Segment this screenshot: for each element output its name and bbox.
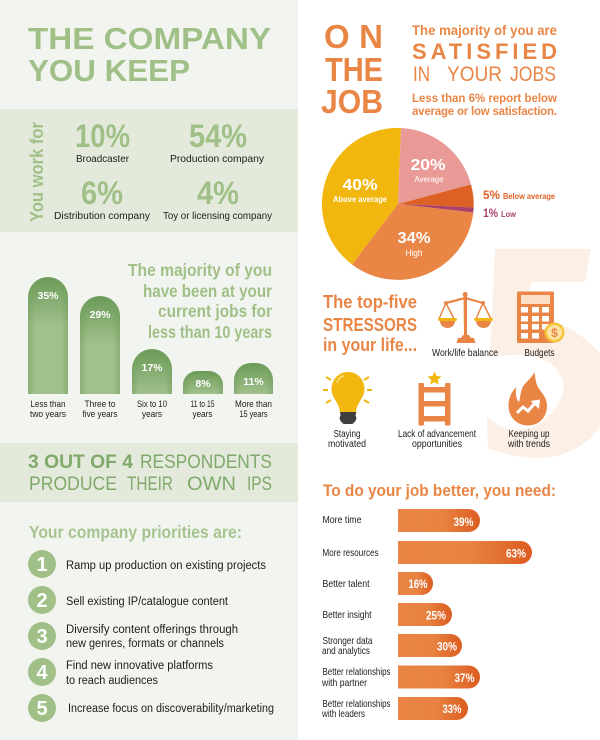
bar: less than two years: 35% xyxy=(37,290,59,302)
slice: above average xyxy=(322,128,401,264)
heading: satisfied in your jobs: The majority of you are xyxy=(412,23,557,38)
heading: satisfied in your jobs: JOBS xyxy=(510,62,556,86)
bar: six to 10 years xyxy=(132,349,172,420)
bar: better relationships with partner: with partner xyxy=(321,677,367,689)
callout: 1% low: 1% xyxy=(483,206,498,220)
callout: 1% low xyxy=(483,206,516,220)
pie label: 40% above average: Above average xyxy=(333,194,387,204)
slice: average xyxy=(398,128,471,204)
bar: more than 15 years: 15 years xyxy=(240,409,268,420)
priority 4: to reach audiences xyxy=(66,675,158,687)
bar: 11 to 15 years xyxy=(183,371,223,420)
label: work/life balance: Work/life balance xyxy=(432,348,498,359)
stat: broadcaster: 10% xyxy=(75,118,130,154)
panel: you work for xyxy=(0,109,298,232)
priority 2: 2 xyxy=(36,590,48,612)
bar: three to five years: Three to xyxy=(84,399,116,410)
bar: six to 10 years: years xyxy=(142,409,162,420)
panel: 3 out of 4 respondents xyxy=(0,443,298,502)
bar: less than two years xyxy=(28,277,68,420)
heading: majority at current jobs: The majority of you xyxy=(128,260,272,280)
label: keeping up with trends: with trends xyxy=(507,439,550,450)
heading: top-five stressors xyxy=(323,292,417,355)
pie label: 34% high: High xyxy=(406,248,422,258)
heading: satisfied in your jobs: YOUR xyxy=(447,62,502,86)
bar: better relationships with leaders xyxy=(321,697,468,720)
priority 3 xyxy=(28,622,238,650)
icon: calculator, budgets: $ xyxy=(551,326,558,340)
heading: satisfied in your jobs xyxy=(412,23,557,118)
bar: more time: More time xyxy=(322,514,362,526)
bar: better relationships with partner: 37% xyxy=(454,671,475,685)
label: lack of advancement opportunities xyxy=(398,429,476,450)
callout: 5% below average: 5% xyxy=(483,188,500,202)
bar: more resources: More resources xyxy=(322,547,378,559)
bar: stronger data and analytics xyxy=(322,634,462,657)
panel: 3 out of 4 respondents: OWN xyxy=(187,473,236,495)
heading: satisfied in your jobs: SATISFIED xyxy=(412,39,557,64)
priority 3: new genres, formats or channels xyxy=(66,638,224,650)
rotated heading: you work for: You work for xyxy=(26,122,47,222)
stat: production company xyxy=(170,118,265,165)
bar: better talent: Better talent xyxy=(322,578,370,590)
big background numeral 5 xyxy=(487,249,600,458)
bar: better relationships with leaders: 33% xyxy=(442,702,462,716)
icon: calculator, budgets xyxy=(517,292,564,359)
panel: 3 out of 4 respondents: RESPONDENTS xyxy=(140,451,272,473)
bar: less than two years: Less than xyxy=(30,399,66,410)
stat: distribution company: 6% xyxy=(81,175,123,211)
bar: more time xyxy=(322,509,480,532)
heading: majority at current jobs: have been at your xyxy=(143,281,272,301)
heading: top-five stressors: in your life... xyxy=(323,335,417,355)
bar: stronger data and analytics: 30% xyxy=(437,640,457,654)
heading: top-five stressors: The top-five xyxy=(323,292,417,312)
bar: stronger data and analytics: and analytics xyxy=(322,645,370,657)
stat: toy or licensing company: 4% xyxy=(197,175,239,211)
heading: majority at current jobs: current jobs for xyxy=(158,301,272,321)
callout: 5% below average: Below average xyxy=(503,191,555,201)
label: staying motivated: motivated xyxy=(328,439,366,450)
priority 1: 1 xyxy=(36,554,48,576)
title: on the job: ON xyxy=(324,18,383,55)
heading: majority at current jobs xyxy=(128,260,272,342)
pie label: 20% average xyxy=(410,157,446,184)
pie label: 34% high: 34% xyxy=(398,230,430,247)
pie label: 40% above average: 40% xyxy=(342,177,378,194)
panel: the company you keep background xyxy=(0,0,298,740)
callout: 5% below average xyxy=(483,188,555,202)
title: the company you keep: THE COMPANY xyxy=(28,21,271,56)
stat: broadcaster: Broadcaster xyxy=(76,153,129,165)
priority 2: Sell existing IP/catalogue content xyxy=(66,596,229,608)
pie chart: job satisfaction xyxy=(322,128,474,280)
bar: better talent: 16% xyxy=(408,577,428,591)
panel: 3 out of 4 respondents: THEIR xyxy=(127,473,173,495)
priority 3: 3 xyxy=(36,626,48,648)
slice: high xyxy=(352,204,473,280)
label: budgets: Budgets xyxy=(524,348,554,359)
label: keeping up with trends xyxy=(507,429,550,450)
bar chart: what you need xyxy=(321,509,532,720)
priority 5: 5 xyxy=(36,698,48,720)
title: the company you keep xyxy=(28,21,271,88)
panel: 3 out of 4 respondents: PRODUCE xyxy=(29,473,117,495)
heading: satisfied in your jobs: Less than 6% report below xyxy=(412,93,557,105)
bar: six to 10 years: Six to 10 xyxy=(137,399,167,410)
bar: three to five years: 29% xyxy=(89,309,111,321)
priority 4 xyxy=(28,658,213,687)
stat: broadcaster xyxy=(75,118,130,165)
bar: more resources: 63% xyxy=(506,546,526,560)
bar: better relationships with partner xyxy=(321,666,480,689)
bar: stronger data and analytics: Stronger data xyxy=(322,635,373,647)
priority 2 xyxy=(28,586,229,614)
icon: ladder and star, lack of advancement xyxy=(398,372,476,450)
priority 5 xyxy=(28,694,274,722)
heading: satisfied in your jobs: average or low satisfaction. xyxy=(412,106,557,118)
priority 1: Ramp up production on existing projects xyxy=(66,560,266,572)
heading: satisfied in your jobs: IN xyxy=(413,62,430,86)
label: lack of advancement opportunities: opportunities xyxy=(412,439,462,450)
bar: more than 15 years: 11% xyxy=(243,376,264,388)
icon: flame with arrow, keeping up with trends xyxy=(507,372,550,450)
pie label: 20% average: 20% xyxy=(410,157,446,174)
bar: 11 to 15 years: years xyxy=(192,409,213,420)
priority 4: Find new innovative platforms xyxy=(66,660,213,672)
stat: production company: Production company xyxy=(170,153,265,165)
bar: less than two years: two years xyxy=(30,409,66,420)
bar: six to 10 years: 17% xyxy=(141,362,163,374)
bar chart: years at job xyxy=(28,277,273,420)
stat: toy or licensing company: Toy or licensing company xyxy=(163,210,273,222)
label: staying motivated xyxy=(328,429,366,450)
bar: 11 to 15 years: 11 to 15 xyxy=(190,399,214,410)
priorities list xyxy=(28,550,274,722)
heading: majority at current jobs: less than 10 years xyxy=(148,322,272,342)
label: keeping up with trends: Keeping up xyxy=(508,429,550,440)
heading: to do your job better: To do your job better, you need: xyxy=(323,481,556,500)
stat: distribution company xyxy=(54,175,151,222)
stat: distribution company: Distribution company xyxy=(54,210,151,222)
bar: better insight xyxy=(322,603,452,626)
icon: light bulb, staying motivated xyxy=(323,372,372,450)
bar: three to five years xyxy=(80,296,120,420)
heading: top-five stressors: STRESSORS xyxy=(323,315,417,335)
bar: more than 15 years: More than xyxy=(235,399,272,410)
stat: toy or licensing company xyxy=(163,175,273,222)
bar: better insight: Better insight xyxy=(322,609,372,621)
bar: more resources xyxy=(322,541,532,564)
bar: better relationships with partner: Better relationships xyxy=(322,666,390,678)
bar: better insight: 25% xyxy=(426,608,446,622)
slice: below average xyxy=(398,184,474,208)
bar: better relationships with leaders: Better relationships xyxy=(322,698,390,710)
title: the company you keep: YOU KEEP xyxy=(28,53,190,88)
priority 1 xyxy=(28,550,266,578)
pie label: 20% average: Average xyxy=(414,174,444,184)
icon: scales, work/life balance xyxy=(432,292,498,359)
callout: 1% low: Low xyxy=(501,209,516,219)
bar: better talent xyxy=(322,572,433,595)
bar: more than 15 years xyxy=(234,363,273,420)
stat: production company: 54% xyxy=(189,118,247,154)
bar: better relationships with leaders: with leaders xyxy=(321,708,365,720)
label: lack of advancement opportunities: Lack of advancement xyxy=(398,429,476,440)
priority 3: Diversify content offerings through xyxy=(66,624,238,636)
pie label: 34% high xyxy=(398,230,430,258)
title: on the job xyxy=(321,18,383,120)
label: staying motivated: Staying xyxy=(334,429,360,440)
heading: your company priorities: Your company priorities are: xyxy=(29,522,242,542)
bar: three to five years: five years xyxy=(82,409,118,420)
pie label: 40% above average xyxy=(333,177,387,204)
title: on the job: JOB xyxy=(321,83,383,120)
slice: low xyxy=(398,204,474,212)
priority 4: 4 xyxy=(36,662,48,684)
priority 5: Increase focus on discoverability/marketing xyxy=(68,703,274,715)
panel: 3 out of 4 respondents: 3 OUT OF 4 xyxy=(28,451,133,473)
bar: 11 to 15 years: 8% xyxy=(195,378,211,390)
bar: more time: 39% xyxy=(454,515,474,529)
title: on the job: THE xyxy=(325,51,383,88)
panel: 3 out of 4 respondents: IPS xyxy=(247,473,272,495)
